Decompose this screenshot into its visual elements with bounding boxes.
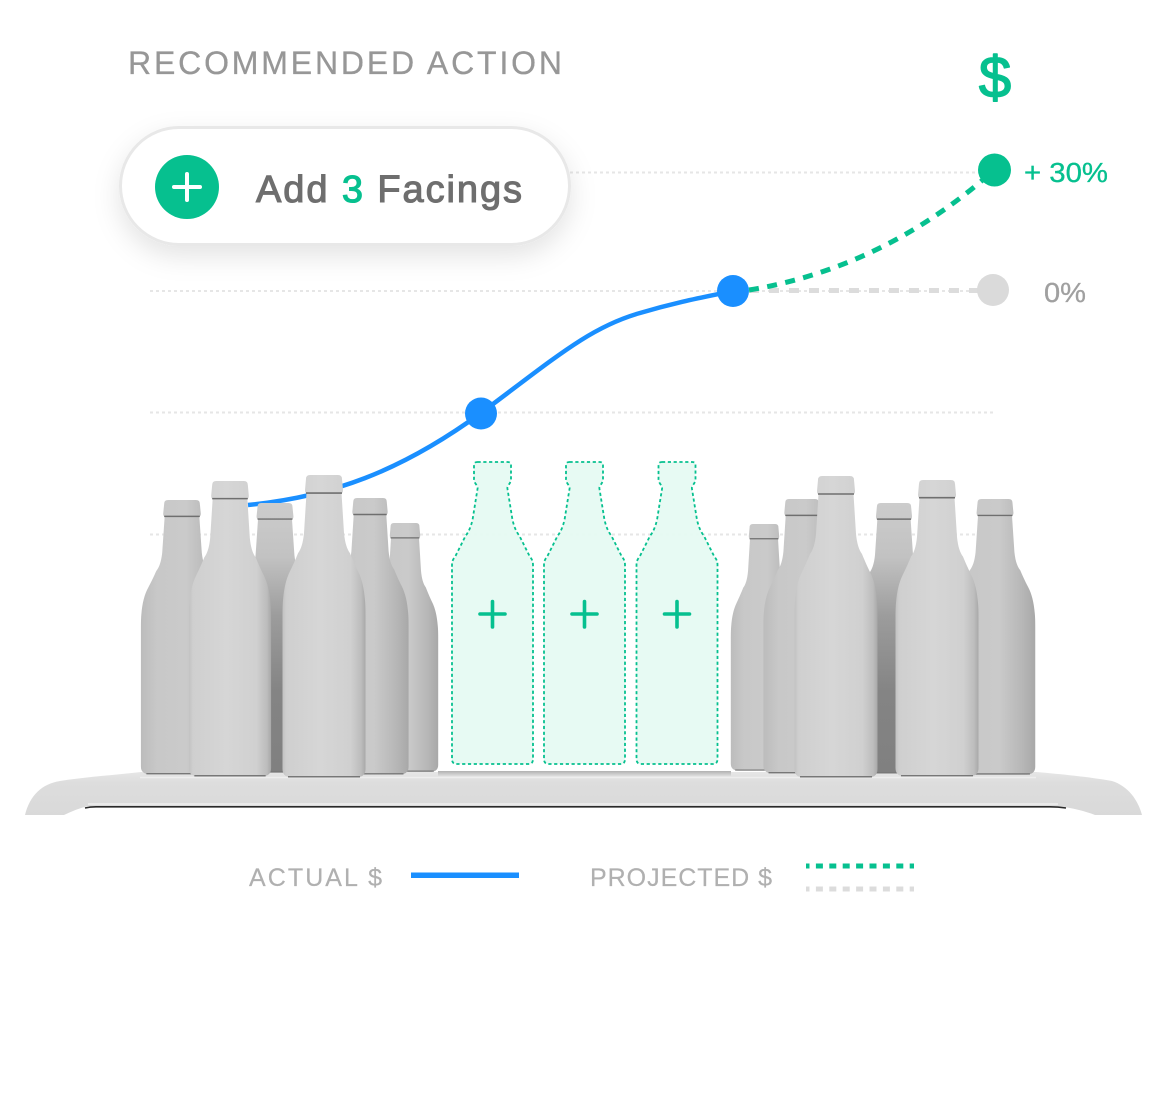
icon: dollar sign: $ — [979, 45, 1011, 110]
legend: projected label: PROJECTED $ — [590, 864, 772, 892]
label: 0 percent: 0% — [1044, 277, 1086, 308]
bottle: back right 2 — [763, 499, 841, 773]
heading: RECOMMENDED ACTION — [128, 45, 562, 81]
bottle: back left 1 — [141, 500, 223, 774]
bottle: back right 4 — [855, 503, 933, 773]
legend: actual line — [411, 872, 519, 878]
action pill — [120, 128, 570, 244]
bottle: back left 6 — [372, 523, 438, 772]
bottles: left group — [141, 475, 438, 777]
bottle: front left 2 — [189, 481, 271, 776]
legend: projected flat swatch — [806, 886, 914, 892]
label: plus 30 percent: + 30% — [1024, 157, 1108, 188]
shelf — [25, 771, 1142, 815]
chart grid lines — [150, 172, 995, 534]
point: projected plus 30 percent — [978, 154, 1011, 186]
actual sales line — [248, 291, 733, 505]
bottle: front right 3 — [794, 476, 878, 778]
point: actual mid — [465, 398, 497, 430]
bottle: front left 4 — [282, 475, 366, 777]
projected flat line — [749, 288, 980, 293]
icon: plus circle — [155, 155, 219, 219]
ghost bottle 2 — [544, 462, 625, 764]
bottle: front right 5 — [896, 480, 978, 776]
bottle: back left 5 — [331, 498, 409, 774]
point: actual end — [717, 275, 749, 307]
legend: actual label: ACTUAL $ — [249, 864, 382, 892]
projected growth line — [749, 178, 985, 290]
legend — [249, 864, 914, 892]
point: projected 0 percent — [977, 274, 1009, 306]
bottle: back left 3 — [235, 503, 315, 773]
bottles: right group — [731, 476, 1035, 778]
bottle: back right 1 — [731, 524, 797, 771]
ghost bottle 1 — [452, 462, 533, 764]
legend: projected growth swatch — [806, 864, 914, 868]
action text: Add 3 Facings — [256, 169, 522, 211]
bottle: back right 6 — [955, 499, 1035, 775]
suggested new facings — [452, 462, 718, 764]
ghost bottle 3 — [636, 462, 718, 764]
